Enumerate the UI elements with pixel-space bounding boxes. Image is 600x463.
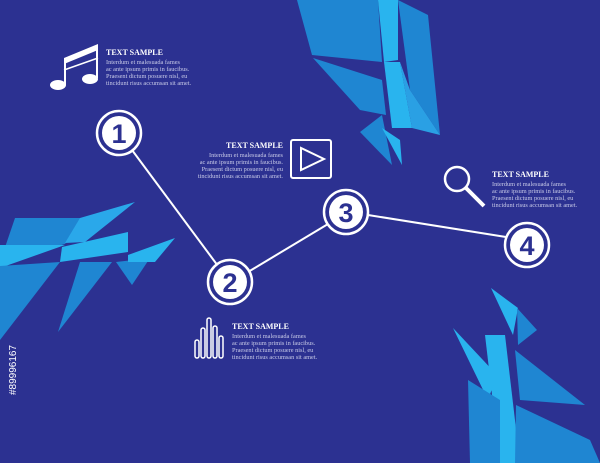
text block 3: Interdum et malesuada fames — [492, 181, 567, 188]
text block 1: tincidunt risus accumsan sit amet. — [106, 80, 192, 87]
node 1: 1 — [111, 119, 127, 149]
text block 3: ac ante ipsum primis in faucibus. — [492, 188, 576, 195]
text block 4: ac ante ipsum primis in faucibus. — [232, 340, 316, 347]
connector lines — [132, 150, 506, 272]
text block 3: Praesent dictum posuere nisl, eu — [492, 195, 574, 202]
node 3: 3 — [338, 198, 354, 228]
text block 2: ac ante ipsum primis in faucibus. — [200, 159, 283, 166]
text block 2: tincidunt risus accumsan sit amet. — [198, 173, 283, 180]
text block 1: Interdum et malesuada fames — [106, 59, 181, 66]
icon: music note — [50, 44, 98, 90]
text block 4: Praesent dictum posuere nisl, eu — [232, 347, 314, 354]
side id text: #89996167 — [8, 345, 19, 395]
node 4: 4 — [519, 231, 535, 261]
icon: magnifier — [445, 167, 484, 206]
text block 2: Interdum et malesuada fames — [209, 152, 284, 159]
shape: top crystal — [297, 0, 440, 165]
shape: bottom right crystal — [453, 288, 600, 463]
node 4 — [505, 223, 549, 267]
icon: play — [291, 140, 331, 178]
text block 1: TEXT SAMPLE — [106, 48, 163, 57]
shape: left crystal — [0, 202, 175, 340]
node 3 — [324, 190, 368, 234]
text block 1: ac ante ipsum primis in faucibus. — [106, 66, 190, 73]
icon: equalizer — [195, 318, 223, 358]
text block 3: tincidunt risus accumsan sit amet. — [492, 202, 578, 209]
text block 2: Praesent dictum posuere nisl, eu — [202, 166, 284, 173]
text block 2: TEXT SAMPLE — [226, 141, 283, 150]
node 2: 2 — [222, 268, 238, 298]
text block 1 — [106, 48, 192, 87]
text block 4: tincidunt risus accumsan sit amet. — [232, 354, 318, 361]
node 2 — [208, 260, 252, 304]
text block 3 — [492, 170, 578, 209]
text block 4 — [232, 322, 318, 361]
text block 4: TEXT SAMPLE — [232, 322, 289, 331]
node 1 — [97, 111, 141, 155]
text block 2 — [198, 141, 284, 180]
text block 4: Interdum et malesuada fames — [232, 333, 307, 340]
text block 1: Praesent dictum posuere nisl, eu — [106, 73, 188, 80]
text block 3: TEXT SAMPLE — [492, 170, 549, 179]
